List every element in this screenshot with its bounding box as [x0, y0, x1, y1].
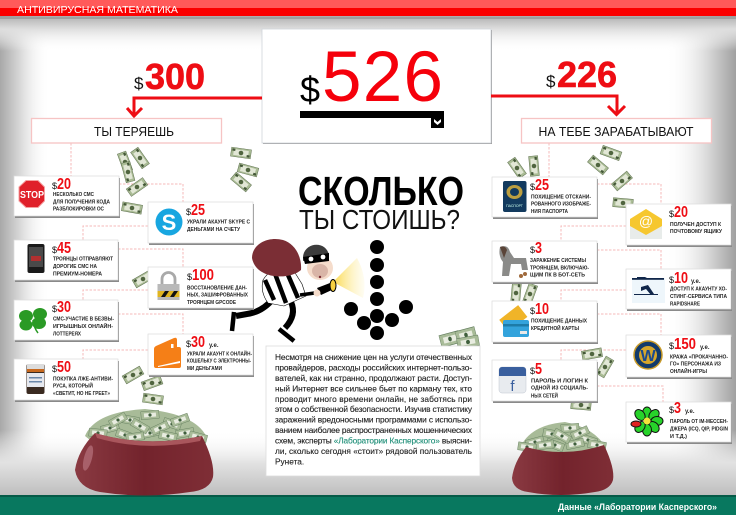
card: email $20 [626, 204, 732, 247]
right amount: $226: $ [546, 72, 556, 91]
card: ICQ $3: 3 [674, 400, 681, 417]
heading: they earn on you: НА ТЕБЕ ЗАРАБАТЫВАЮТ [538, 125, 694, 139]
main title: СКОЛЬКО [298, 168, 464, 214]
article text panel [266, 346, 480, 476]
icon: world of warcraft: W [640, 348, 656, 365]
arrow to left header [127, 98, 262, 116]
icon: file hosting logo [632, 277, 665, 303]
card: wallet $30 [148, 334, 254, 377]
card: credit cards $10: $ [530, 306, 535, 316]
icon: envelope: @ [639, 213, 653, 229]
article text panel: ванием наиболее распространенных мошеннических [275, 425, 473, 435]
card: Skype $25: УКРАЛИ АКАУНТ SKYPE С [187, 220, 250, 226]
heading: you lose: ТЫ ТЕРЯЕШЬ [94, 125, 174, 139]
card: ICQ $3 [626, 400, 732, 444]
card: lock $100: $ [187, 272, 192, 282]
article text panel: Несмотря на снижение цен на услуги отечественных [275, 352, 473, 362]
left amount: $300: $ [134, 74, 144, 93]
card: clover $30: ЛОТТЕРЕЯХ [53, 332, 81, 338]
card: Facebook $5: ОДНОЙ ИЗ СОЦИАЛЬ- [531, 384, 588, 392]
card: WoW $150: ОНЛАЙН-ИГРЫ [670, 367, 707, 375]
card: ICQ $3: $ [669, 405, 674, 415]
icon: padlock [158, 272, 180, 300]
card: rapidshare $10: 10 [674, 270, 688, 287]
article text panel: ли, сколько сегодня «стоит» рядовой пользователь [275, 446, 472, 456]
left money bag [75, 409, 213, 496]
card: passport $25: $ [530, 182, 535, 192]
card: fake antivirus $50: ПОКУПКА ЛЖЕ-АНТИВИ- [53, 376, 113, 382]
card: trojan $3: ТРОЯНЦЕМ, ВКЛЮЧАЮ- [530, 266, 589, 272]
card: STOP SMS $20: $ [52, 181, 57, 191]
heading: they earn on you [522, 118, 712, 143]
card: clover $30: СМС-УЧАСТИЕ В БЕЗВЫ- [53, 316, 114, 322]
icon: credit cards [499, 305, 529, 337]
card: email $20: ПОЛУЧЕН ДОСТУП К [670, 222, 722, 228]
article text panel: провайдеров, расходы российских интернет-пользо- [275, 363, 472, 373]
icon: pill bottle [26, 364, 44, 394]
article text panel: этом о собственной безопасности. Изучив статистику [275, 404, 473, 414]
card: passport $25: НИЯ ПАСПОРТА [531, 209, 568, 215]
card: rapidshare $10: $ [669, 275, 674, 285]
card: Facebook $5: 5 [535, 361, 542, 378]
card: phone $45: 45 [57, 240, 71, 257]
card: fake antivirus $50 [14, 359, 119, 402]
icon: smartphone [28, 244, 44, 273]
card: STOP SMS $20: НЕСКОЛЬКО СМС [53, 192, 94, 198]
card: trojan $3: ЗАРАЖЕНИЕ СИСТЕМЫ [530, 258, 586, 264]
bottom banner: Данные «Лаборатории Касперского» [558, 502, 717, 513]
card: lock $100: ТРОЯНЦЕМ GPCODE [187, 300, 236, 306]
card: credit cards $10 [492, 301, 598, 344]
card: email $20: ПОЧТОВОМУ ЯЩИКУ [670, 229, 722, 235]
card: Facebook $5: НЫХ СЕТЕЙ [531, 392, 558, 400]
card: trojan $3 [492, 240, 598, 284]
card: clover $30: ИГРЫШНЫХ ОНЛАЙН- [53, 322, 113, 330]
card: rapidshare $10: СТИНГ-СЕРВИСА ТИПА [670, 294, 727, 300]
card: ICQ $3: у.е. [685, 409, 695, 415]
card: passport $25: ПОХИЩЕНИЕ ОТСКАНИ- [531, 194, 591, 200]
falling money bills [117, 145, 633, 410]
icon: stop sign: STOP [20, 189, 44, 201]
card: rapidshare $10 [626, 269, 732, 311]
card: lock $100 [148, 267, 254, 310]
central total panel: 526 [322, 38, 443, 117]
article text panel: ный Интернет все сильнее бьет по карману тех, кто [275, 384, 472, 394]
card: trojan $3: 3 [535, 240, 542, 257]
card: STOP SMS $20: 20 [57, 176, 71, 193]
card: STOP SMS $20: ДЛЯ ПОЛУЧЕНИЯ КОДА [53, 200, 110, 206]
card: Skype $25: $ [186, 207, 191, 217]
card: WoW $150: КРАЖА «ПРОКАЧАННО- [670, 354, 728, 360]
left amount: $300: 300 [145, 56, 205, 97]
card: Skype $25: 25 [191, 202, 205, 219]
connector lines [71, 143, 663, 402]
article text panel: проводит много времени онлайн, не заботясь при [275, 394, 472, 404]
card: Skype $25: ДЕНЬГАМИ НА СЧЕТУ [187, 227, 240, 233]
card: passport $25 [492, 177, 598, 219]
card: phone $45 [14, 240, 119, 282]
burglar illustration [232, 239, 365, 341]
card: trojan $3: ЩИМ ПК В БОТ-СЕТЬ [530, 272, 585, 278]
card: Skype $25 [148, 202, 254, 245]
card: wallet $30: $ [186, 339, 191, 349]
card: email $20: $ [669, 209, 674, 219]
top banner: АНТИВИРУСНАЯ МАТЕМАТИКА [17, 4, 178, 16]
card: fake antivirus $50: 50 [57, 359, 71, 376]
card: fake antivirus $50: «СВЕТИТ, НО НЕ ГРЕЕТ» [53, 391, 110, 397]
card: phone $45: $ [52, 245, 57, 255]
card: Facebook $5: ПАРОЛЬ И ЛОГИН К [531, 378, 589, 384]
card: phone $45: ДОРОГИЕ СМС НА [53, 264, 97, 270]
card: wallet $30: у.е. [209, 343, 219, 349]
icon: passport: ПАСПОРТ [506, 204, 524, 208]
icon: orange wallet [154, 338, 181, 368]
card: fake antivirus $50: $ [52, 364, 57, 374]
article text panel: схем, эксперты «Лаборатории Касперского» выясни- [275, 436, 472, 446]
card: ICQ $3: ДЖЕРА (ICQ, QIP, PIDGIN [670, 426, 728, 432]
dotted down arrow [344, 240, 413, 340]
main title [298, 168, 464, 235]
icon: skype: S [162, 210, 176, 235]
card: rapidshare $10: у.е. [691, 279, 701, 285]
card: lock $100: НЫХ, ЗАШИФРОВАННЫХ [187, 292, 248, 298]
card: Facebook $5: $ [530, 366, 535, 376]
card: passport $25: РОВАННОГО ИЗОБРАЖЕ- [531, 202, 591, 208]
right money bag [512, 422, 613, 495]
card: credit cards $10: 10 [535, 301, 549, 318]
icon: trojan horse [499, 246, 528, 278]
icon: ICQ flower [631, 407, 663, 436]
card: wallet $30: МИ ДЕНЬГАМИ [187, 366, 222, 372]
bottom banner [0, 495, 736, 515]
heading: you lose [32, 118, 222, 143]
money stack [439, 327, 480, 349]
card: lock $100: ВОССТАНОВЛЕНИЕ ДАН- [187, 286, 247, 292]
card: Facebook $5 [492, 360, 598, 403]
article text panel: вателей, как ни странно, продолжают расти. Доступ- [275, 373, 472, 383]
card: STOP SMS $20 [14, 176, 120, 218]
card: clover $30 [14, 299, 119, 342]
card: trojan $3: $ [530, 245, 535, 255]
top banner [0, 0, 736, 19]
card: rapidshare $10: RAPIDSHARE [670, 302, 700, 308]
card: wallet $30: УКРАЛИ АКАУНТ К ОНЛАЙН- [187, 350, 252, 358]
icon: clover [19, 308, 47, 333]
card: passport $25: 25 [535, 177, 549, 194]
main title: ТЫ СТОИШЬ? [299, 204, 460, 235]
card: lock $100: 100 [192, 267, 214, 284]
card: fake antivirus $50: РУСА, КОТОРЫЙ [53, 382, 93, 390]
card: credit cards $10: ПОХИЩЕНИЕ ДАННЫХ [531, 318, 587, 324]
article text panel: заражений вредоносными программами с использо- [275, 415, 472, 425]
card: phone $45: ПРЕМИУМ-НОМЕРА [53, 272, 102, 278]
card: wallet $30: КОШЕЛЬКУ С ЭЛЕКТРОННЫ- [187, 358, 251, 364]
card: clover $30: $ [52, 304, 57, 314]
icon: facebook calendar: f [510, 378, 515, 395]
central total panel: $ [300, 69, 320, 110]
card: WoW $150: $ [669, 341, 674, 351]
card: WoW $150: у.е. [700, 345, 710, 351]
card: WoW $150 [626, 335, 732, 379]
card: WoW $150: 150 [674, 336, 696, 353]
card: email $20: 20 [674, 204, 688, 221]
central total panel [262, 29, 492, 144]
card: WoW $150: ГО» ПЕРСОНАЖА ИЗ [670, 362, 721, 368]
card: rapidshare $10: ДОСТУП К АКАУНТУ ХО- [670, 286, 727, 292]
card: credit cards $10: КРЕДИТНОЙ КАРТЫ [531, 324, 579, 332]
card: phone $45: ТРОЯНЦЫ ОТПРАВЛЯЮТ [53, 256, 113, 262]
card: clover $30: 30 [57, 299, 71, 316]
card: ICQ $3: И Т.Д.) [670, 434, 687, 440]
arrow to right header [491, 96, 625, 114]
article text panel: Рунета. [275, 456, 304, 466]
right amount: $226: 226 [557, 54, 617, 95]
card: wallet $30: 30 [191, 334, 205, 351]
card: STOP SMS $20: РАЗБЛОКИРОВКИ ОС [53, 206, 104, 212]
